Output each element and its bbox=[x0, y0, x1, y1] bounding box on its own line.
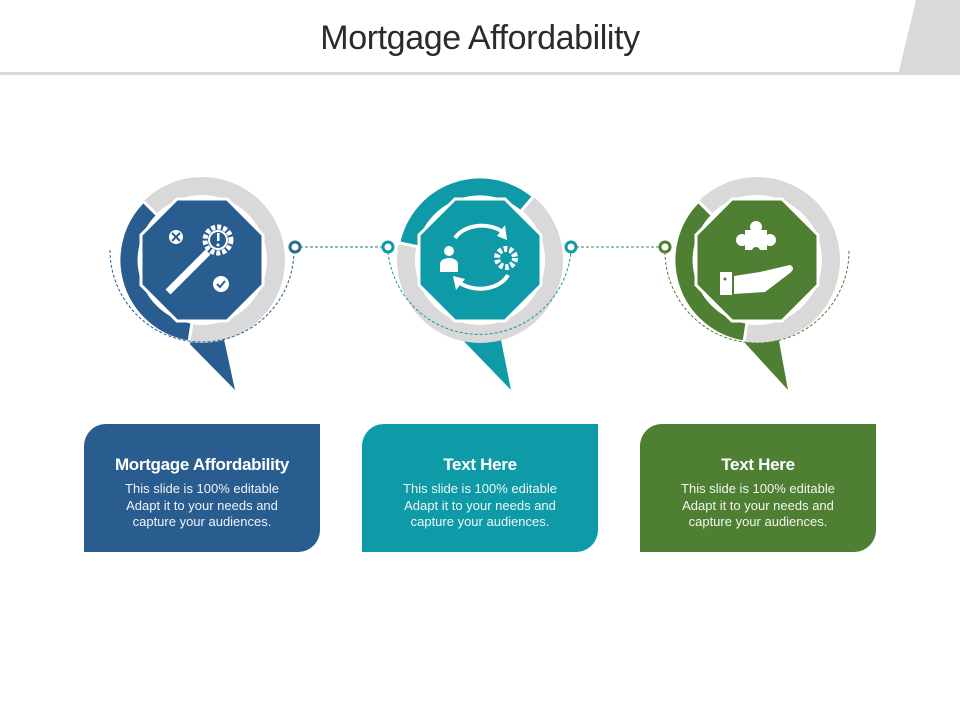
box 1: capture your audiences. bbox=[133, 514, 271, 529]
box 2: capture your audiences. bbox=[411, 514, 549, 529]
marker 2 bbox=[383, 177, 576, 390]
box 1 bbox=[84, 424, 320, 552]
header rule and corner tab bbox=[0, 0, 960, 75]
box 2 bbox=[362, 424, 598, 552]
box 1: This slide is 100% editable bbox=[125, 481, 279, 496]
connector lines bbox=[300, 246, 660, 248]
title: Mortgage Affordability bbox=[320, 19, 640, 57]
box 1: Adapt it to your needs and bbox=[126, 498, 278, 512]
box 3: This slide is 100% editable bbox=[681, 481, 835, 496]
icon: cycle person gear bbox=[440, 225, 515, 290]
box 3: Text Here bbox=[721, 455, 795, 474]
box 3 bbox=[640, 424, 876, 552]
box 2: Adapt it to your needs and bbox=[404, 498, 556, 512]
icon: pencil gear bbox=[168, 227, 231, 292]
marker 1 bbox=[110, 186, 300, 390]
box 1: Mortgage Affordability bbox=[115, 455, 289, 474]
diagram bbox=[110, 177, 850, 390]
marker 3 bbox=[660, 186, 849, 390]
box 3: capture your audiences. bbox=[689, 514, 827, 529]
box 2: This slide is 100% editable bbox=[403, 481, 557, 496]
icon: puzzle hand bbox=[720, 221, 793, 295]
box 3: Adapt it to your needs and bbox=[682, 498, 834, 512]
box 2: Text Here bbox=[443, 455, 517, 474]
